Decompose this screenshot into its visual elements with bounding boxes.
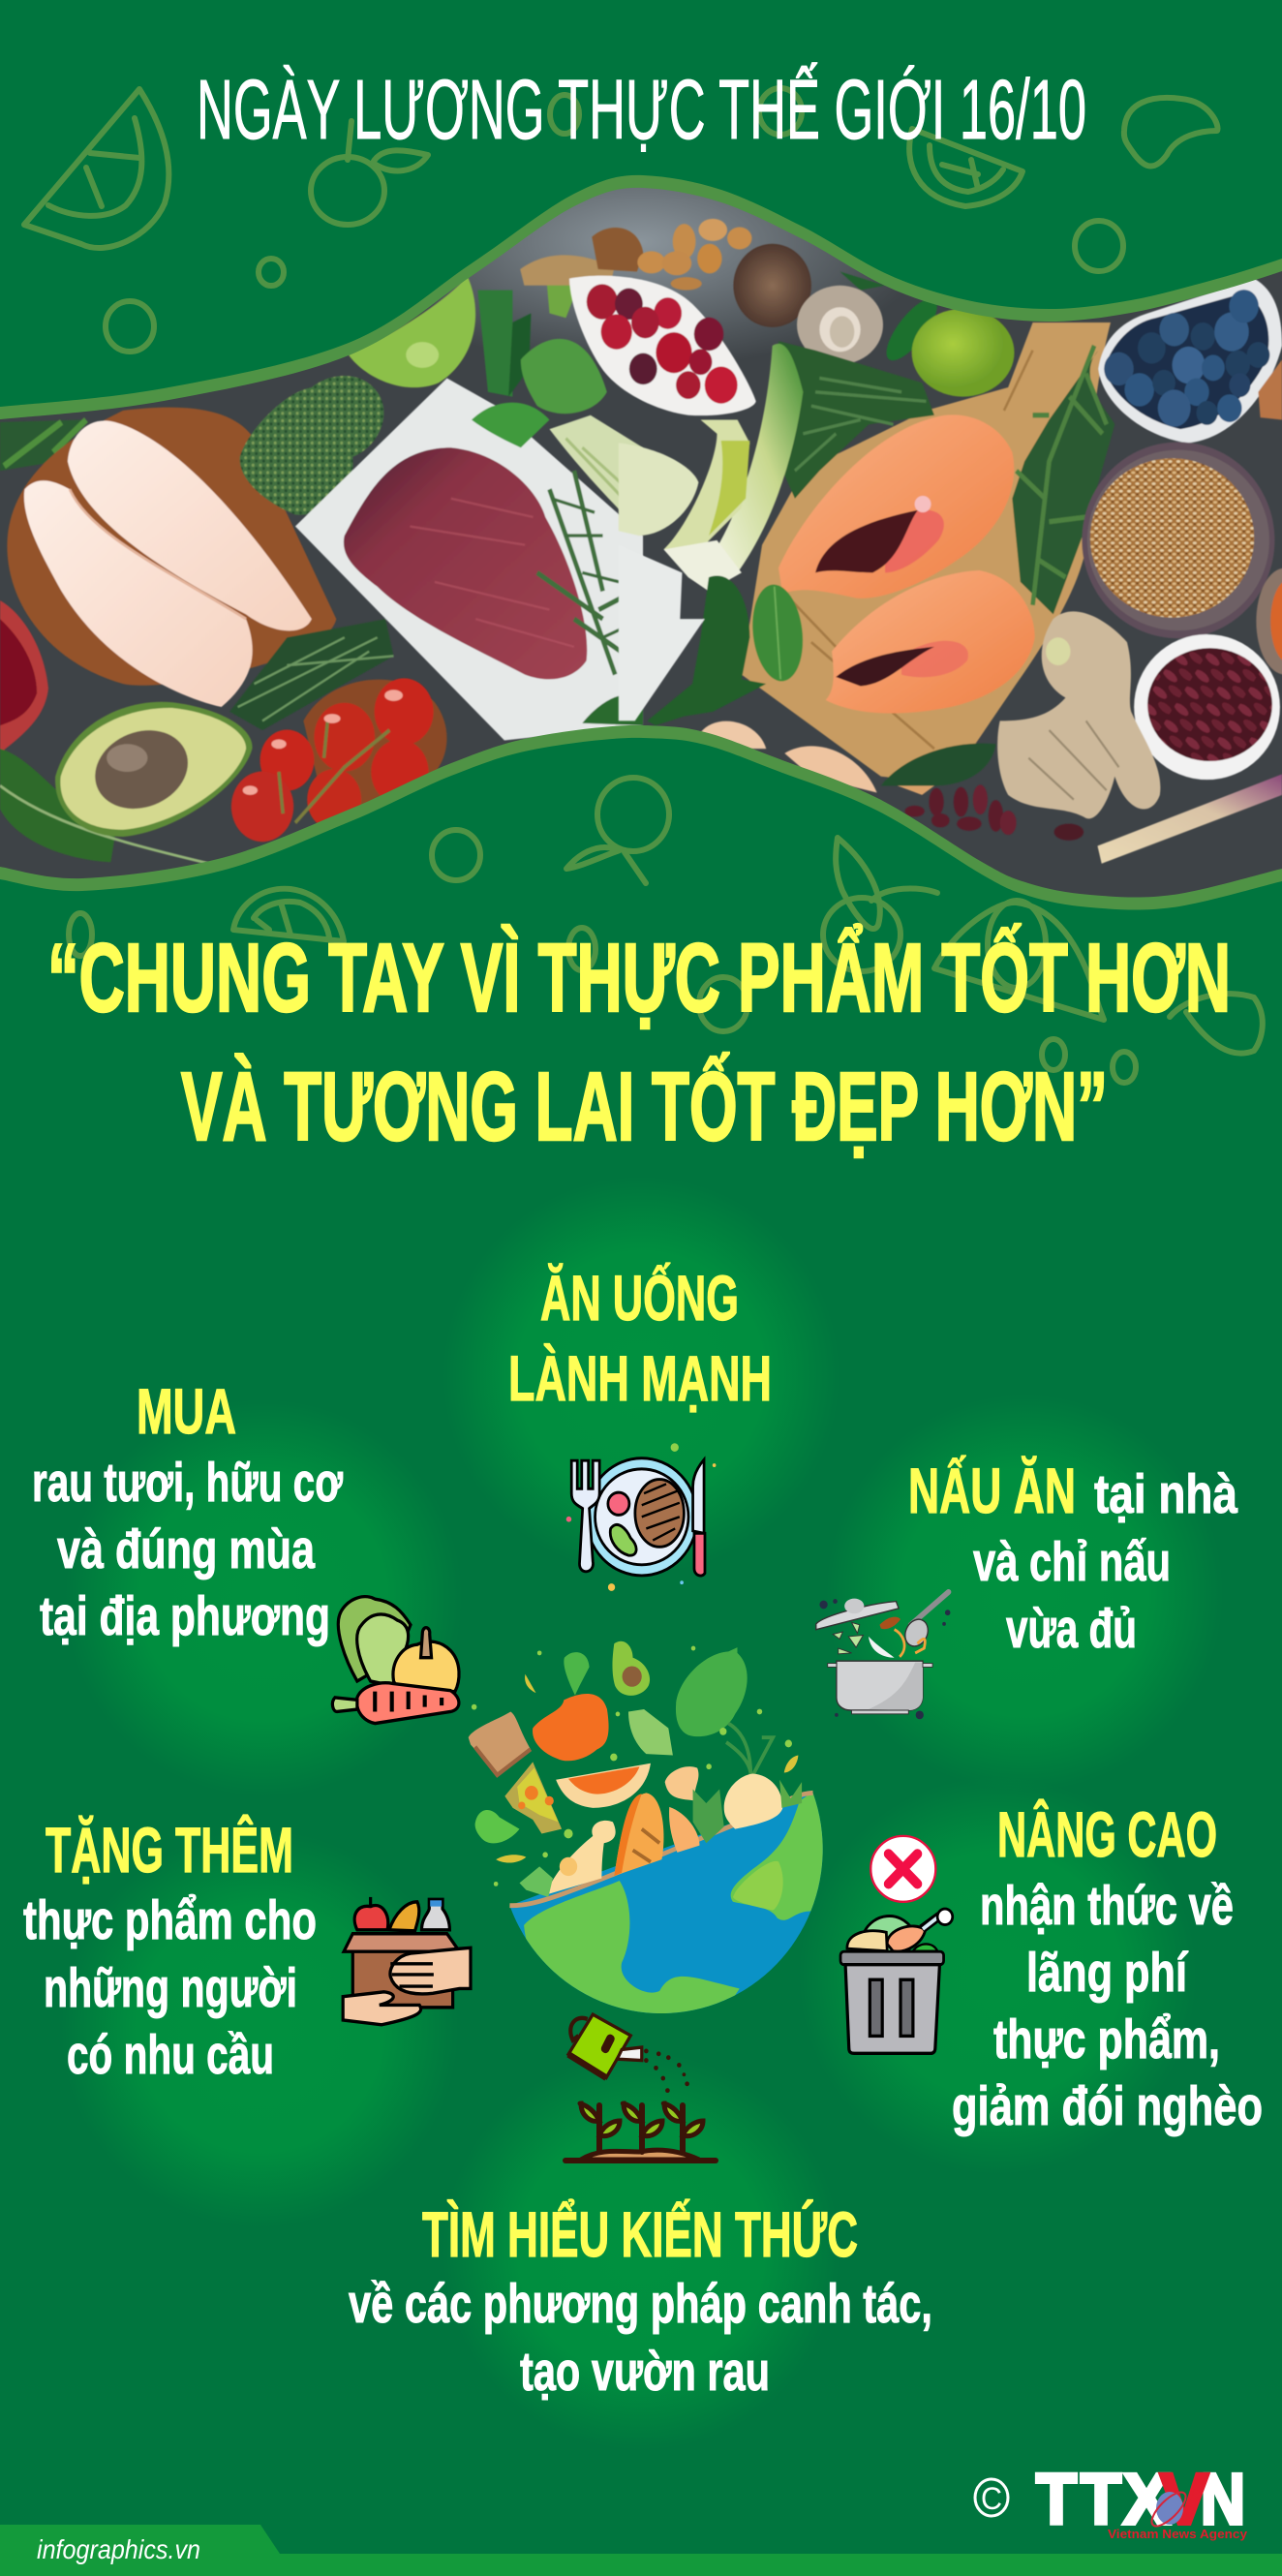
- icon: food waste bin with red cross: [840, 1836, 953, 2053]
- text block: ăn uống lành mạnh: LÀNH MẠNH: [508, 1342, 772, 1414]
- icon: sprouts: [565, 2103, 716, 2161]
- decorative food outlines: [24, 88, 1263, 1083]
- logo: TTXVN Vietnam News Agency: X: [1123, 2459, 1170, 2539]
- photo right half: salmon, bowls, ginger, lime: [520, 219, 1282, 864]
- text block: mua: [32, 1375, 343, 1647]
- logo: TTXVN Vietnam News Agency: V: [1160, 2459, 1208, 2539]
- text block: tìm hiểu kiến thức: tạo vườn rau: [520, 2341, 770, 2403]
- text block: nấu ăn: NẤU ĂN: [908, 1455, 1076, 1526]
- logo: TTXVN Vietnam News Agency: T: [1081, 2459, 1121, 2539]
- icon: lettuce, pumpkin and carrot: [332, 1597, 459, 1724]
- background glow circles: [61, 1177, 1223, 2450]
- headline slogan: [47, 923, 1231, 1161]
- text block: nấu ăn: vừa đủ: [1006, 1598, 1137, 1660]
- text block: nấu ăn: [908, 1455, 1237, 1660]
- copyright symbol: C: [981, 2481, 1002, 2516]
- text block: mua: tại địa phương: [40, 1585, 330, 1647]
- text block: nấu ăn: tại nhà: [1094, 1463, 1237, 1525]
- text block: tặng thêm: [23, 1814, 317, 2086]
- bottom wave section shape: [0, 725, 1282, 1272]
- text block: nấu ăn: và chỉ nấu: [973, 1531, 1171, 1593]
- logo: TTXVN Vietnam News Agency: Vietnam News Agency: [1108, 2527, 1248, 2541]
- central illustration: food spilling over half earth: [469, 1641, 823, 2013]
- text block: mua: và đúng mùa: [57, 1518, 316, 1580]
- logo: TTXVN Vietnam News Agency: N: [1201, 2459, 1245, 2539]
- text block: tìm hiểu kiến thức: [349, 2198, 932, 2403]
- text block: tìm hiểu kiến thức: TÌM HIỂU KIẾN THỨC: [422, 2198, 858, 2270]
- icons and central illustration: [332, 1443, 953, 2093]
- logo: TTXVN Vietnam News Agency: T: [1036, 2459, 1077, 2539]
- text block: tặng thêm: những người: [44, 1957, 297, 2019]
- text block: mua: MUA: [137, 1375, 236, 1447]
- text block: tặng thêm: có nhu cầu: [67, 2024, 274, 2086]
- icon: donation box with hands: [343, 1897, 471, 2025]
- icon: plate with steak, fork and knife: [566, 1443, 716, 1591]
- text block: nâng cao: [952, 1798, 1263, 2137]
- photo: assorted healthy food: [0, 116, 1282, 910]
- logo: TTXVN Vietnam News Agency: [1036, 2459, 1248, 2541]
- icon: watering can: [568, 2014, 689, 2093]
- footer website text: infographics.vn: [37, 2534, 200, 2564]
- text block: ăn uống lành mạnh: ĂN UỐNG: [540, 1262, 739, 1334]
- top wave header shape: [0, 0, 1282, 419]
- copyright symbol: [975, 2479, 1008, 2516]
- text block: nâng cao: lãng phí: [1026, 1942, 1189, 2004]
- icon: pot with flying ingredients: [816, 1592, 950, 1719]
- text block: ăn uống lành mạnh: [508, 1262, 772, 1414]
- text block: tặng thêm: TẶNG THÊM: [46, 1814, 293, 1886]
- text block: tìm hiểu kiến thức: về các phương pháp canh tác,: [349, 2273, 932, 2335]
- text block: tặng thêm: thực phẩm cho: [23, 1889, 317, 1951]
- photo left half: chicken, beef, avocado, tomatoes: [0, 256, 643, 865]
- text block: mua: rau tươi, hữu cơ: [32, 1452, 343, 1514]
- footer bar and tab: [0, 2525, 1282, 2576]
